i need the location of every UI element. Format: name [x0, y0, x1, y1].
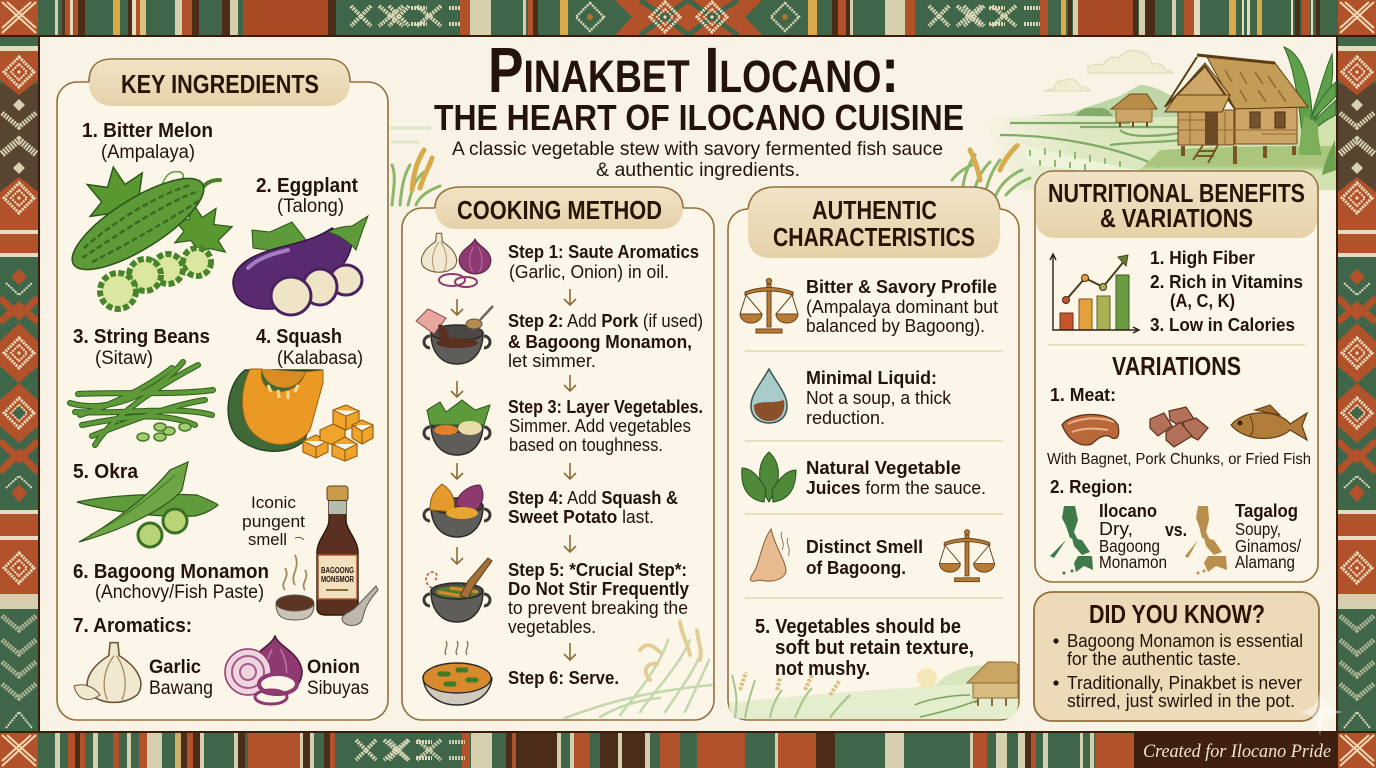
- main hut: [1165, 55, 1308, 164]
- label: eggplant: (Talong): [277, 196, 344, 217]
- step 4 text: [508, 487, 678, 527]
- arrow: [564, 375, 576, 391]
- icon: fried fish: [1231, 405, 1307, 440]
- title: Pinakbet Ilocano:: [488, 34, 899, 106]
- callout: iconic pungent smell: pungent: [242, 512, 305, 531]
- heading: nutritional benefits: [1036, 172, 1317, 238]
- label: eggplant: [256, 175, 358, 217]
- step 5 text: to prevent breaking the: [508, 597, 688, 618]
- icon: eggplant: [233, 216, 368, 315]
- icon: bagoong bottle: MONSMOR: [321, 575, 354, 584]
- heading: variations: VARIATIONS: [1112, 351, 1241, 381]
- right woven border: [1338, 37, 1376, 731]
- label: string beans: 3. String Beans: [73, 326, 210, 348]
- subtitle: & authentic ingredients.: [596, 159, 800, 181]
- text: bitter and savory: balanced by Bagoong).: [806, 315, 985, 336]
- label: squash: (Kalabasa): [277, 348, 363, 369]
- step 3 text: Simmer. Add vegetables: [509, 415, 691, 436]
- step 4 text: Sweet Potato last.: [508, 506, 654, 527]
- text: minimal liquid: [806, 367, 952, 428]
- label: bitter melon: 1. Bitter Melon: [82, 120, 213, 142]
- icon: onion: [225, 636, 302, 704]
- icon: bagoong bowl: [276, 555, 314, 620]
- text: distinct smell: [806, 536, 923, 578]
- arrow: [451, 299, 463, 315]
- mountain: [1030, 85, 1200, 118]
- arrow: [564, 535, 576, 552]
- callout: iconic pungent smell: Iconic: [251, 493, 296, 512]
- text: minimal liquid: reduction.: [806, 407, 885, 428]
- subtitle: [452, 138, 943, 181]
- text: vegetables texture: [755, 616, 974, 680]
- step 2 text: let simmer.: [508, 350, 596, 371]
- heading: authentic characteristics: [748, 187, 1000, 258]
- icon: garlic: [74, 643, 141, 702]
- step 3 text: based on toughness.: [509, 434, 663, 455]
- region text: ilocano: Ilocano: [1099, 500, 1157, 521]
- left woven border: [0, 37, 38, 731]
- fact 2: [1053, 672, 1302, 711]
- region text: tagalog: Tagalog: [1235, 500, 1298, 521]
- rice field: [985, 117, 1336, 190]
- label: bagoong monamon: (Anchovy/Fish Paste): [95, 582, 264, 603]
- icon: step 5 stirring pot: [424, 558, 492, 622]
- chart: benefits bars: [1050, 254, 1139, 333]
- label: squash: [256, 326, 363, 369]
- text: vegetables texture: 5. Vegetables should be: [755, 616, 961, 638]
- arrow: [451, 463, 463, 479]
- step 5 text: Step 5: *Crucial Step*:: [508, 559, 687, 580]
- heading: did you know: DID YOU KNOW?: [1089, 599, 1265, 629]
- heading: authentic characteristics: AUTHENTIC: [812, 195, 937, 225]
- label: onion: Onion: [307, 657, 360, 678]
- icon: liquid drop: [751, 369, 787, 423]
- region text: tagalog: [1235, 500, 1301, 572]
- step 3 text: [508, 396, 703, 455]
- label: aromatics: 7. Aromatics:: [73, 615, 192, 637]
- text: vegetables texture: not mushy.: [775, 658, 870, 680]
- fact 2: Traditionally, Pinakbet is never: [1067, 672, 1302, 693]
- panel: key ingredients: [57, 59, 388, 720]
- title: THE HEART OF ILOCANO CUISINE: [434, 97, 964, 138]
- benefits list: [1150, 247, 1303, 335]
- icon: step 2 pot: [416, 306, 493, 364]
- illustration: rice stalks: [565, 622, 712, 718]
- step 1 text: (Garlic, Onion) in oil.: [509, 261, 669, 282]
- region text: ilocano: Dry,: [1099, 518, 1133, 539]
- icon: step 1 aromatics: [421, 233, 491, 287]
- fact 2: stirred, just swirled in the pot.: [1067, 690, 1295, 711]
- label: meat: 1. Meat:: [1050, 384, 1116, 405]
- label: onion: [307, 657, 369, 699]
- panel: did you know: [1034, 592, 1319, 721]
- text: minimal liquid: Minimal Liquid:: [806, 367, 937, 388]
- icon: okra: [77, 462, 218, 547]
- step 5 text: [508, 559, 690, 637]
- arrow: [564, 289, 576, 305]
- icon: step 3 pot with vegetables: [424, 400, 490, 455]
- panel: authentic characteristics: [728, 187, 1019, 720]
- benefits list: 2. Rich in Vitamins: [1150, 271, 1303, 292]
- label: bagoong monamon: 6. Bagoong Monamon: [73, 561, 269, 583]
- step 3 text: Step 3: Layer Vegetables.: [508, 396, 703, 417]
- text: vegetable juices: Juices form the sauce.: [806, 477, 986, 498]
- icon: philippines map tan: [1185, 506, 1227, 574]
- text: bitter and savory: Bitter & Savory Profile: [806, 276, 997, 297]
- text: vegetable juices: [806, 457, 986, 498]
- callout: iconic pungent smell: smell: [248, 530, 287, 549]
- label: squash: 4. Squash: [256, 326, 342, 348]
- text: vegetable juices: Natural Vegetable: [806, 457, 961, 478]
- icon: bitter melon: [60, 163, 232, 309]
- text: distinct smell: Distinct Smell: [806, 536, 923, 557]
- step 6 text: Step 6: Serve.: [508, 667, 619, 688]
- heading: nutritional benefits: & VARIATIONS: [1100, 203, 1253, 233]
- region text: ilocano: Monamon: [1099, 552, 1167, 572]
- sparkle: [1296, 690, 1344, 736]
- fact 1: [1053, 630, 1303, 669]
- step 4 text: Step 4: Add Squash &: [508, 487, 678, 508]
- label: bagoong monamon: [73, 561, 269, 603]
- heading: nutritional benefits: NUTRITIONAL BENEFITS: [1048, 178, 1305, 208]
- caption: meat options: With Bagnet, Pork Chunks, or Fried Fish: [1047, 451, 1311, 468]
- step 2 text: [508, 310, 703, 371]
- label: garlic: [149, 657, 213, 699]
- farm scene: top right: [985, 47, 1336, 190]
- icon: step 6 serving bowl: [423, 641, 492, 705]
- credit ribbon: [1134, 733, 1338, 768]
- top woven border: [0, 0, 1376, 37]
- step 1 text: [508, 241, 699, 282]
- step 2 text: Step 2: Add Pork (if used): [508, 310, 703, 331]
- icon: step 4 pot with squash: [424, 484, 490, 537]
- heading: key ingredients: [89, 59, 350, 106]
- illustration: paddy and hut: [729, 662, 1018, 719]
- region text: ilocano: [1099, 500, 1167, 572]
- text: minimal liquid: Not a soup, a thick: [806, 387, 952, 408]
- benefits list: 1. High Fiber: [1150, 247, 1255, 268]
- icon: string beans: [70, 362, 213, 445]
- label: eggplant: 2. Eggplant: [256, 175, 358, 197]
- grass: title right: [952, 145, 1030, 200]
- icon: balance scale: [740, 278, 798, 333]
- label: bitter melon: (Ampalaya): [101, 142, 195, 163]
- label: region: 2. Region:: [1050, 476, 1133, 497]
- heading: key ingredients: KEY INGREDIENTS: [121, 69, 319, 99]
- title: [434, 34, 964, 138]
- region text: tagalog: Soupy,: [1235, 519, 1281, 539]
- label: okra: 5. Okra: [73, 461, 139, 483]
- step 5 text: vegetables.: [508, 616, 596, 637]
- arrow: [451, 381, 463, 397]
- heading: authentic characteristics: CHARACTERISTICS: [773, 222, 975, 252]
- label: onion: Sibuyas: [307, 678, 369, 699]
- icon: balance scale small: [939, 530, 995, 582]
- icon: bagoong bottle: [317, 486, 378, 625]
- small hut: [1111, 94, 1157, 127]
- arrow: [564, 643, 576, 660]
- icon: spinach leaves: [742, 452, 796, 502]
- arrow: [451, 547, 463, 564]
- region text: tagalog: Alamang: [1235, 552, 1295, 572]
- icon: bagoong bottle: BAGOONG: [321, 566, 354, 575]
- text: distinct smell: of Bagoong.: [806, 557, 906, 578]
- label: string beans: (Sitaw): [95, 348, 153, 369]
- benefits list: (A, C, K): [1170, 290, 1235, 311]
- callout: iconic pungent smell: [242, 493, 305, 549]
- grass tufts: [1322, 140, 1336, 175]
- panel: cooking method: [402, 187, 714, 720]
- text: vegetables texture: soft but retain texture,: [775, 637, 974, 659]
- step 2 text: & Bagoong Monamon,: [508, 331, 692, 352]
- icon: bagnet: [1062, 414, 1119, 445]
- fact 1: for the authentic taste.: [1067, 648, 1241, 669]
- text: bitter and savory: (Ampalaya dominant but: [806, 296, 998, 317]
- icon: nose: [750, 529, 789, 581]
- step 1 text: Step 1: Saute Aromatics: [508, 241, 699, 262]
- fact 1: Bagoong Monamon is essential: [1067, 630, 1303, 651]
- panel: nutritional benefits and variations: [1035, 171, 1318, 582]
- text: bitter and savory: [806, 276, 998, 336]
- region text: tagalog: Ginamos/: [1235, 536, 1301, 556]
- vs label: vs.: [1165, 519, 1187, 540]
- benefits list: 3. Low in Calories: [1150, 314, 1295, 335]
- bottom woven border: [0, 731, 1376, 768]
- label: bitter melon: [82, 120, 213, 163]
- label: string beans: [73, 326, 210, 369]
- region text: ilocano: Bagoong: [1099, 536, 1160, 556]
- credit ribbon: Created for Ilocano Pride: [1143, 741, 1331, 762]
- clouds: [1044, 50, 1173, 91]
- banana plant: [1284, 47, 1336, 150]
- label: garlic: Garlic: [149, 657, 201, 678]
- heading: cooking method: [435, 187, 683, 229]
- grass: title left: [390, 128, 440, 205]
- subtitle: A classic vegetable stew with savory fermented fish sauce: [452, 138, 943, 160]
- icon: squash: [228, 369, 373, 461]
- arrow: [564, 463, 576, 479]
- heading: cooking method: COOKING METHOD: [457, 195, 662, 225]
- icon: philippines map green: [1050, 506, 1093, 574]
- step 5 text: Do Not Stir Frequently: [508, 578, 690, 599]
- icon: pork chunks: [1150, 407, 1208, 447]
- label: garlic: Bawang: [149, 678, 213, 699]
